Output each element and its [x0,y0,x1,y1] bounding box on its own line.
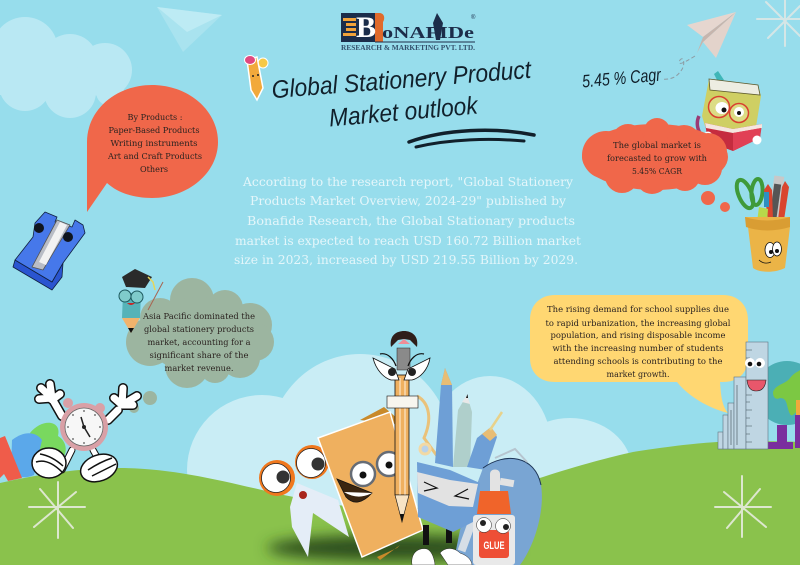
growth drivers text [546,305,731,380]
icon: pencil mascot [244,56,268,100]
forecast text: The global market is [613,141,701,151]
icon: scissors character [259,445,349,557]
growth drivers text: to rapid urbanization, the increasing global [546,319,731,329]
panel: market forecast bubble [582,118,730,212]
glue label: GLUE [484,540,504,552]
forecast text [607,141,708,177]
forecast text: 5.45% CAGR [632,167,683,177]
by products list: Others [140,165,168,175]
icon: sharpener [13,212,85,290]
asia pacific text: Asia Pacific dominated the [142,312,255,322]
title: Global Stationery Product [271,56,533,104]
forecast text: forecasted to grow with [607,154,708,164]
plane dashed trail [662,56,695,79]
asia pacific text: significant share of the [150,351,248,361]
icon: paper plane top left [157,7,222,52]
growth drivers text: population, and rising disposable income [550,331,726,341]
star top right [757,0,800,46]
intro paragraph: Products Market Overview, 2024-29" published by [250,194,566,208]
logo [341,11,476,52]
intro paragraph: market is expected to reach USD 160.72 Billion market [235,234,581,248]
icon: backpack [453,449,542,565]
star bottom right [715,476,771,537]
star bottom left [29,482,85,538]
gloves [39,384,137,420]
icon: alphabet blocks [0,423,66,481]
legs [62,450,102,470]
icon: graduate pencil [119,269,163,333]
thought dot large [701,191,715,205]
growth drivers text: with the increasing number of students [552,344,724,354]
thought dot small [129,403,139,413]
ground shadow [267,535,517,561]
shoes [32,448,121,487]
icon: cup character [412,462,480,565]
icon: globe [755,361,800,449]
icon: pencils in cup [435,368,502,470]
cloud: centre horizon [187,354,632,546]
icon: pencil character [373,331,430,522]
intro paragraph [234,175,581,267]
thought dot small [720,202,730,212]
by products list: Writing instruments [110,139,198,149]
by products list: Paper-Based Products [108,126,200,136]
asia pacific text: global stationery products [144,325,254,335]
panel: growth drivers bubble [530,295,748,413]
icon: book reading character [697,71,762,151]
by products list [107,113,202,175]
growth drivers text: attending schools is contributing to the [554,357,722,367]
icon: glue bottle [473,470,515,565]
registered mark: ® [471,14,476,21]
growth drivers text: market growth. [606,370,670,380]
asia pacific text: market revenue. [164,364,234,374]
hills [0,441,800,565]
icon: background scissors [417,396,440,460]
title: Market outlook [328,91,480,132]
logo wordmark: oNAFIDe [382,23,475,42]
icon: pen cup character [733,176,790,272]
icon: paper plane [687,12,736,58]
by products list: By Products : [128,113,182,123]
icon: ruler characters [718,342,768,449]
icon: alarm clock character [32,384,137,487]
thought dot large [143,391,157,405]
asia pacific text: market, accounting for a [148,338,250,348]
asia pacific text [142,312,255,374]
logo tagline: RESEARCH & MARKETING PVT. LTD. [341,44,475,52]
title underline [409,130,534,147]
cloud: top left [0,17,132,118]
intro paragraph: Bonafide Research, the Global Stationary products [247,214,575,228]
growth drivers text: The rising demand for school supplies due [547,305,729,315]
panel: asia pacific bubble [126,278,274,413]
panel: by products bubble [87,85,218,212]
title [271,56,533,132]
cagr label: 5.45 % Cagr [581,65,662,91]
icon: folder character [318,407,423,560]
icon: pen nib [433,13,443,40]
by products list: Art and Craft Products [107,152,202,162]
intro paragraph: According to the research report, "Global Stationery [242,175,573,189]
logo mark: B [356,11,376,44]
intro paragraph: size in 2023, increased by USD 219.55 Billion by 2029. [234,253,578,267]
